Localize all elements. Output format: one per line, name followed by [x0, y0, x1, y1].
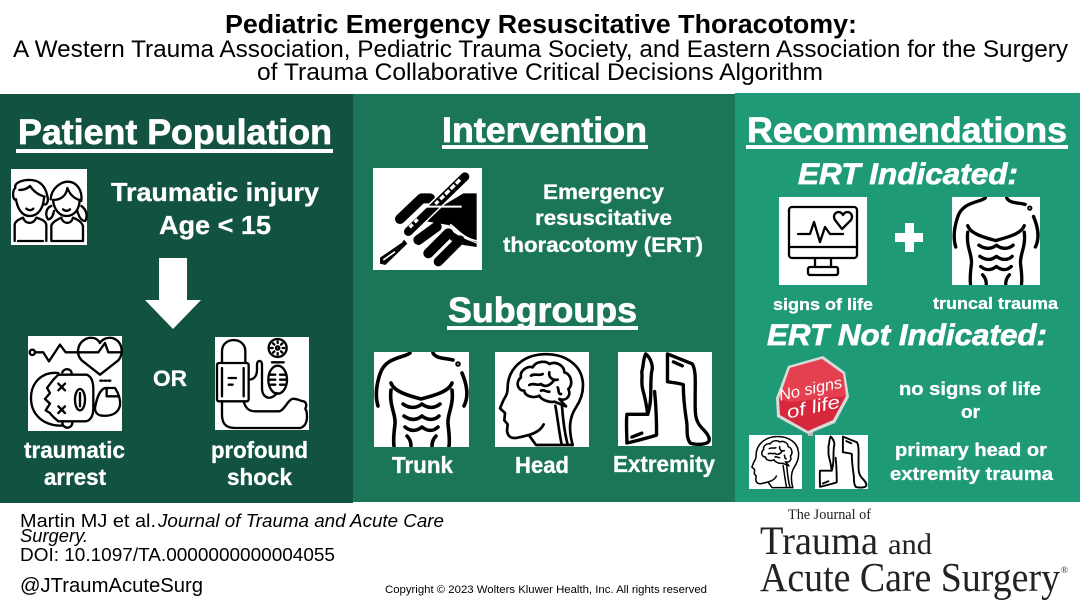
heading: ert indicated: ERT Indicated:	[798, 158, 1018, 191]
citation: Surgery.	[20, 526, 88, 546]
text: profound shock	[211, 437, 308, 490]
label: signs of life: signs of life	[773, 295, 873, 314]
icon: small head	[749, 435, 802, 489]
text: primary head or extremity trauma: extremity trauma	[890, 464, 1054, 484]
citation: Martin MJ et al.	[20, 511, 156, 531]
journal logo: Acute Care Surgery	[760, 554, 1060, 600]
panel: patient population	[0, 94, 353, 503]
panel: intervention	[353, 94, 735, 502]
text: emergency resuscitative thoracotomy: Emergency	[543, 181, 664, 204]
heading: recommendations: Recommendations	[747, 111, 1067, 150]
text: no signs of life or: or	[961, 402, 980, 422]
icon: monitor, signs of life	[779, 197, 867, 285]
copyright: Copyright © 2023 Wolters Kluwer Health, Inc. All rights reserved	[385, 584, 707, 596]
text: profound shock: profound	[211, 437, 308, 463]
icon: trunk	[374, 352, 469, 447]
text: emergency resuscitative thoracotomy: thoracotomy (ERT)	[503, 234, 703, 257]
panel: recommendations	[735, 93, 1080, 502]
text: or: OR	[153, 366, 187, 391]
heading: intervention: Intervention	[442, 111, 647, 150]
text: traumatic injury, age under 15: Traumatic injury	[111, 177, 320, 207]
text: no signs of life or	[899, 379, 1041, 422]
arrow: down	[145, 258, 201, 329]
title block: Pediatric Emergency Resuscitative Thoracotomy:	[225, 11, 857, 39]
journal logo	[760, 507, 1068, 600]
title block: of Trauma Collaborative Critical Decisions Algorithm	[257, 59, 823, 86]
icon: children	[11, 169, 87, 245]
icon: torso, truncal trauma	[952, 197, 1040, 285]
label: extremity: Extremity	[613, 451, 715, 477]
title block	[13, 11, 1068, 86]
text: primary head or extremity trauma: primary head or	[895, 440, 1047, 460]
icon: stop sign, no signs of life: of life	[785, 392, 842, 422]
text: traumatic arrest: traumatic	[24, 437, 125, 463]
citation	[20, 511, 444, 565]
text: traumatic arrest	[24, 437, 125, 490]
text: traumatic arrest: arrest	[44, 464, 106, 490]
citation: Journal of Trauma and Acute Care	[157, 511, 444, 531]
journal logo: The Journal of	[788, 507, 871, 523]
heading: ert not indicated: ERT Not Indicated:	[767, 319, 1047, 352]
citation: DOI: 10.1097/TA.0000000000004055	[20, 545, 335, 565]
text: profound shock: shock	[227, 464, 292, 490]
heading: subgroups: Subgroups	[448, 291, 637, 330]
icon: stop sign, no signs of life: No signs	[778, 375, 844, 405]
icon: stop sign, no signs of life	[776, 356, 849, 436]
text: traumatic injury, age under 15	[111, 177, 320, 240]
label: trunk: Trunk	[392, 452, 453, 478]
icon: head	[495, 352, 589, 447]
icon: plus	[895, 223, 923, 252]
text: traumatic injury, age under 15: Age < 15	[159, 210, 271, 240]
social handle: @JTraumAcuteSurg	[20, 575, 203, 597]
journal logo: Trauma	[760, 518, 878, 563]
text: no signs of life or: no signs of life	[899, 379, 1041, 399]
journal logo: and	[888, 528, 932, 561]
label: head: Head	[515, 452, 569, 478]
text: primary head or extremity trauma	[890, 440, 1054, 484]
text: emergency resuscitative thoracotomy: resuscitative	[535, 207, 672, 230]
journal logo: ®	[1061, 565, 1068, 575]
icon: profound shock	[215, 337, 309, 430]
icon: scalpel in hand	[373, 168, 482, 270]
icon: extremity	[618, 352, 712, 446]
icon: small extremity	[815, 435, 868, 489]
label: truncal trauma: truncal trauma	[933, 294, 1059, 313]
icon: traumatic arrest	[28, 336, 122, 431]
title block: A Western Trauma Association, Pediatric Trauma Society, and Eastern Association for the Surgery	[13, 36, 1068, 63]
heading: patient population: Patient Population	[18, 113, 332, 152]
text: emergency resuscitative thoracotomy	[503, 181, 703, 257]
